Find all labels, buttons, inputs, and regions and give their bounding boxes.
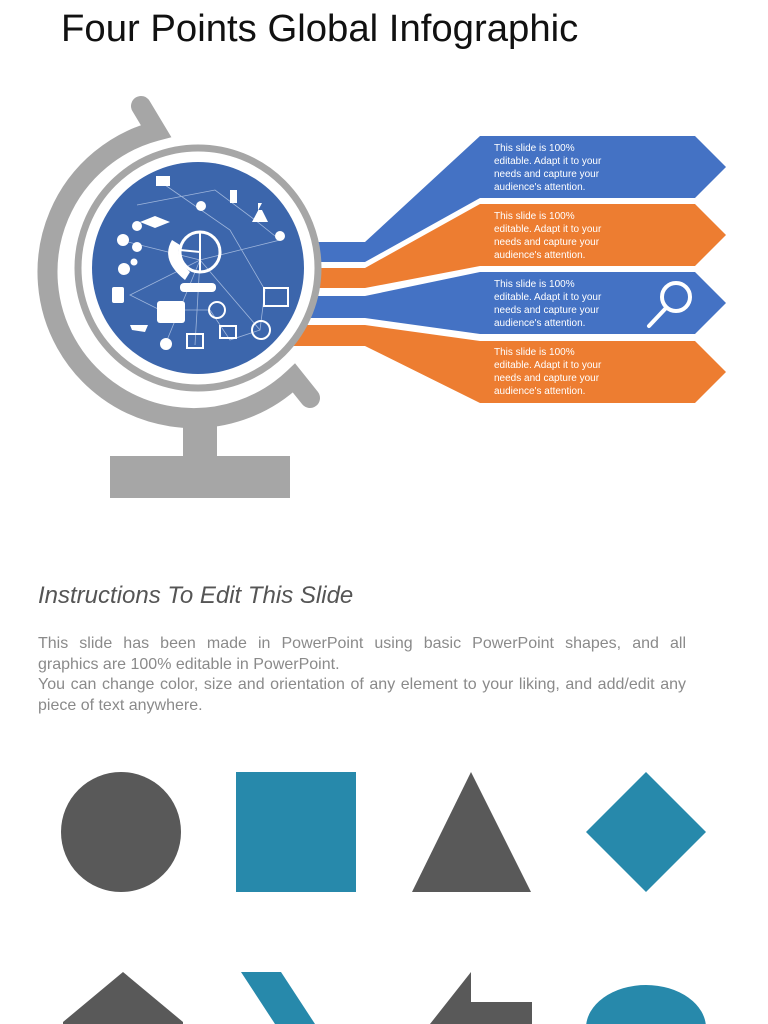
band 3 blue [290,272,726,334]
globe body [92,162,304,374]
band 4 orange [290,325,726,403]
text: audience's attention. [494,250,585,261]
band 2 orange [290,204,726,288]
globe ring [78,148,318,388]
text: This slide is 100% [494,279,575,290]
title: Four Points Global Infographic [61,7,578,50]
magnifier icon [649,283,690,326]
arrow texts: editable. Adapt it to your [494,156,601,167]
text: needs and capture your [494,237,599,248]
text: audience's attention. [494,318,585,329]
arrow texts: needs and capture your [494,169,599,180]
instructions text: This slide has been made in PowerPoint using basic PowerPoint shapes, and all [38,635,686,652]
instructions text [38,635,686,714]
instructions text: You can change color, size and orientation of any element to your liking, and add/edit any piece of text anywhere. [38,676,686,714]
text: audience's attention. [494,386,585,397]
globe and arrows graphic [38,96,726,498]
instructions heading: Instructions To Edit This Slide [38,582,353,609]
text: This slide is 100% [494,211,575,222]
text: needs and capture your [494,305,599,316]
text: editable. Adapt it to your [494,292,601,303]
band 1 blue [290,136,726,262]
text: editable. Adapt it to your [494,224,601,235]
text: needs and capture your [494,373,599,384]
text: This slide is 100% [494,347,575,358]
instructions text: graphics are 100% editable in PowerPoint. [38,656,340,672]
arrow texts [494,143,602,193]
globe stand arc [47,106,310,498]
arrow texts: audience's attention. [494,182,585,193]
shapes [61,772,706,1024]
text: editable. Adapt it to your [494,360,601,371]
arrow texts: This slide is 100% [494,143,575,154]
